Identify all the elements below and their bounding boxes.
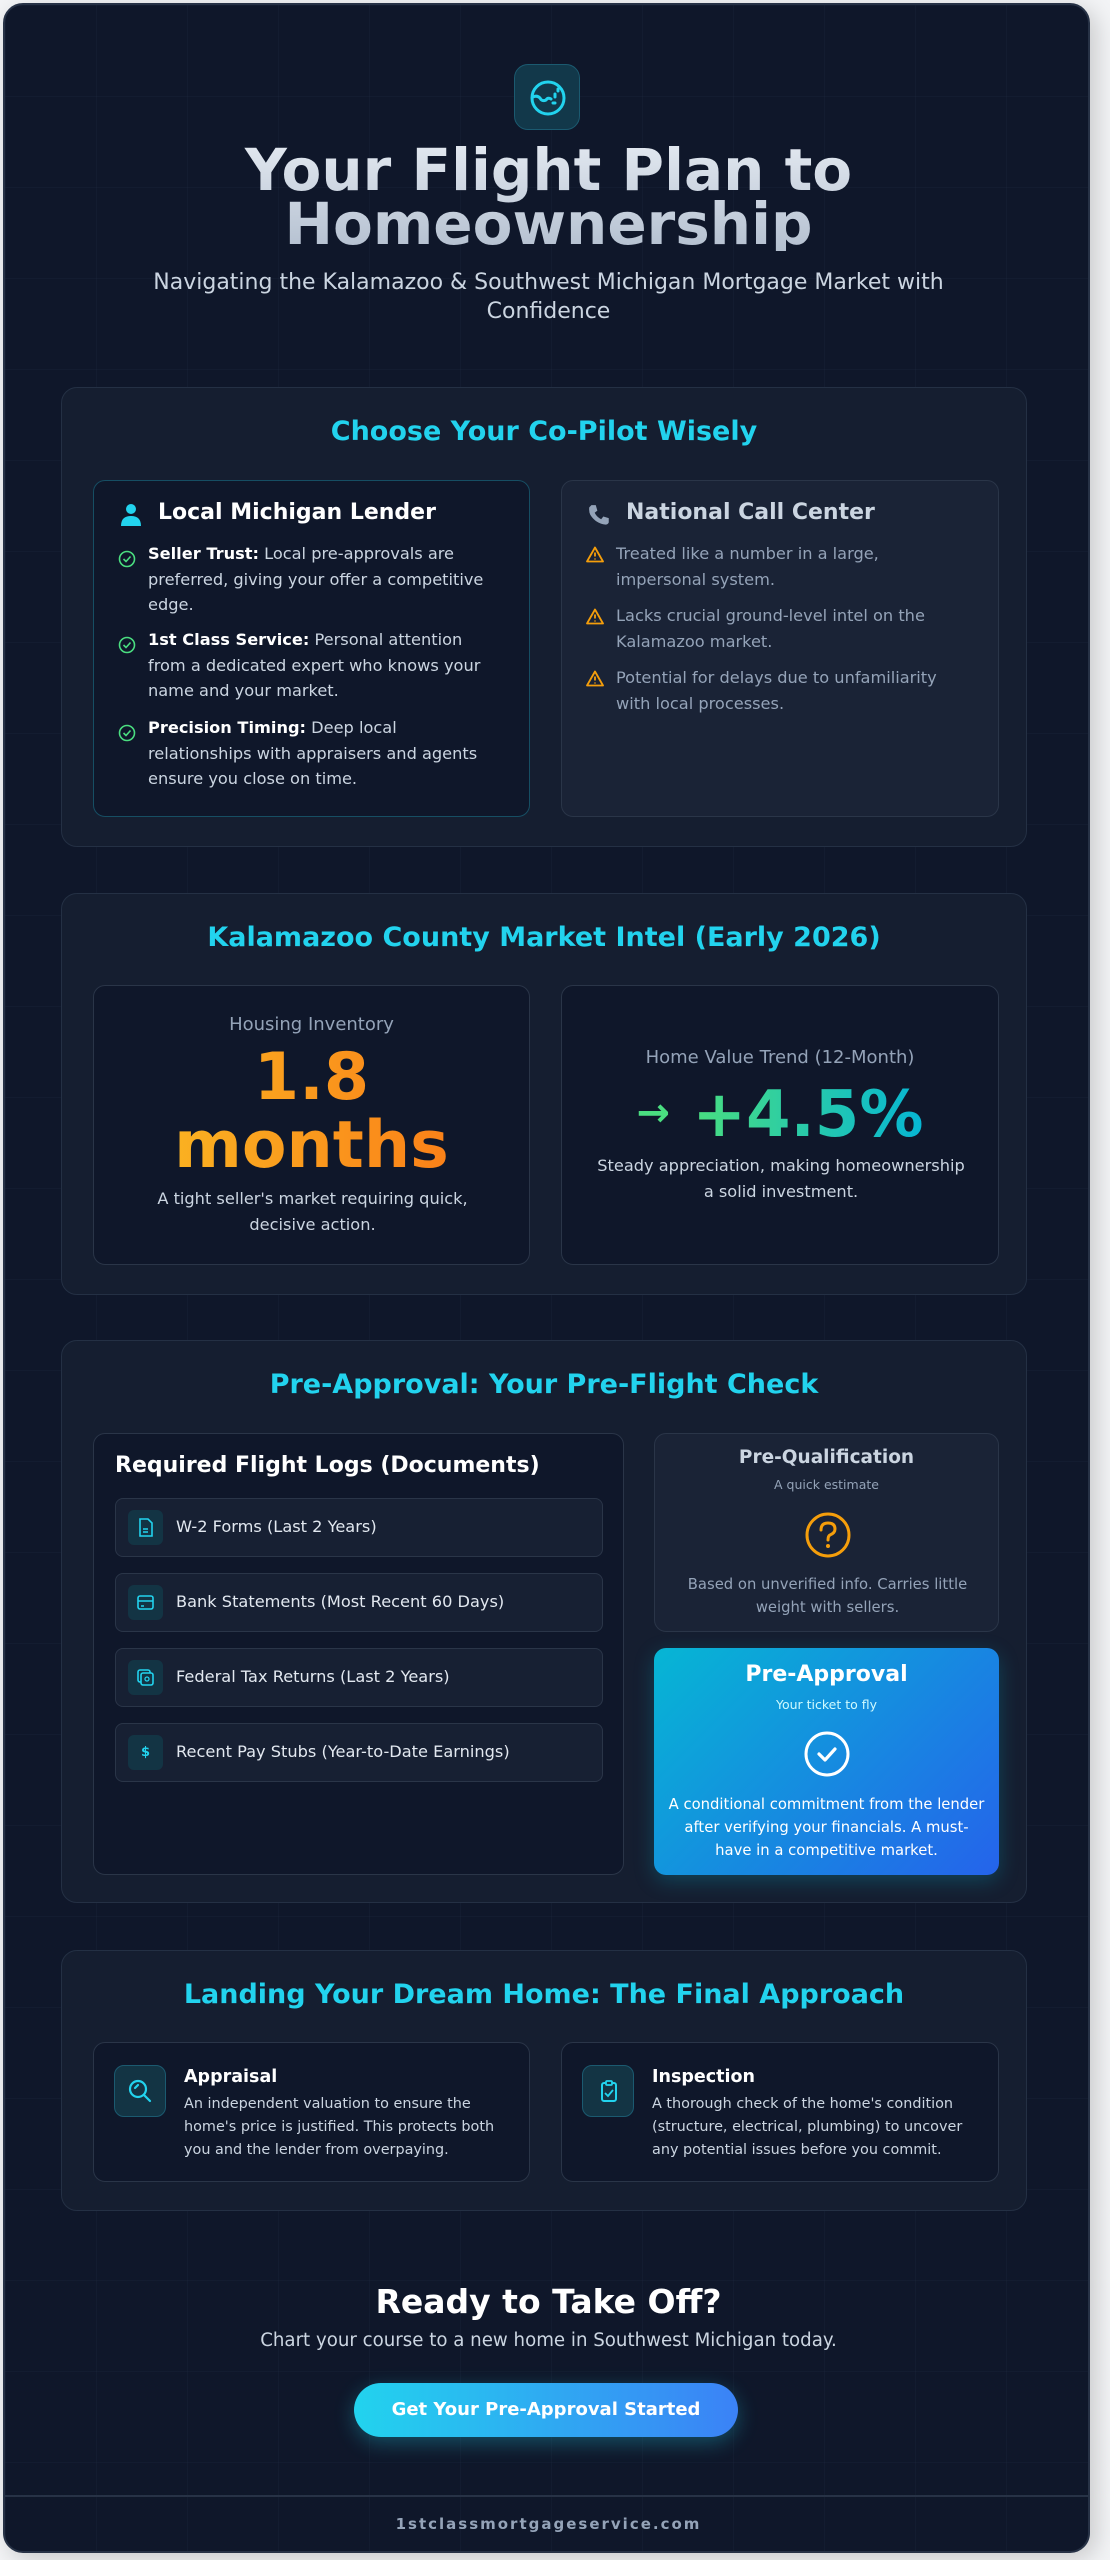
doc: bank statements [115, 1573, 603, 1632]
bullets: national: Lacks crucial ground-level intel on the Kalamazoo market. [616, 606, 925, 650]
stat: home value trend: Steady appreciation, making homeownership a solid investment. [597, 1156, 965, 1201]
cta heading: Ready to Take Off? [375, 2282, 722, 2321]
title [5, 143, 1092, 251]
card: pre-qualification: Pre-Qualification [739, 1447, 914, 1468]
doc: pay stubs: Recent Pay Stubs (Year-to-Date Earnings) [176, 1742, 510, 1761]
heading: final approach: Landing Your Dream Home: The Final Approach [184, 1979, 904, 2010]
heading: pre-approval: Pre-Approval: Your Pre-Flight Check [270, 1369, 818, 1400]
card: pre-approval: A conditional commitment from the lender after verifying your financials. A must-have in a competitive market. [669, 1796, 984, 1859]
card: inspection: A thorough check of the home's condition (structure, electrical, plumbing) to uncover any potential issues before you commit. [652, 2096, 962, 2158]
subtitle: Navigating the Kalamazoo & Southwest Michigan Mortgage Market with Confidence [153, 270, 944, 324]
bullets: local: 1st Class Service: Personal attention from a dedicated expert who knows your name and your market. [148, 630, 480, 700]
bullets: local: Precision Timing: Deep local relationships with appraisers and agents ensure you close on time. [148, 718, 477, 788]
card: appraisal [93, 2042, 530, 2182]
doc: W-2 [115, 1498, 603, 1557]
stat: home value trend: → +4.5% [637, 1078, 923, 1152]
doc: tax returns [115, 1648, 603, 1707]
bullets: national [586, 544, 937, 712]
bullets: local [118, 544, 483, 788]
card: national call center [561, 480, 999, 817]
card: pre-qualification [654, 1433, 999, 1632]
footer url: 1stclassmortgageservice.com [396, 2515, 701, 2533]
card: documents [93, 1433, 624, 1875]
bullets: local: Seller Trust: Local pre-approvals are preferred, giving your offer a competitive edge. [148, 544, 483, 614]
card: inspection: Inspection [652, 2067, 755, 2087]
card: pre-qualification: A quick estimate [774, 1477, 879, 1492]
card: appraisal: Appraisal [184, 2067, 277, 2087]
card: pre-approval: Pre-Approval [745, 1662, 908, 1687]
icon: person [121, 504, 141, 526]
stat: housing inventory: Housing Inventory [229, 1014, 394, 1035]
icon: phone [589, 505, 609, 525]
bullets: national: Treated like a number in a large, impersonal system. [616, 544, 879, 588]
panel: market intel [61, 893, 1027, 1295]
stat: housing inventory: months [174, 1108, 449, 1183]
cta button [354, 2383, 738, 2437]
heading: choose co-pilot: Choose Your Co-Pilot Wisely [331, 416, 757, 447]
heading: national: National Call Center [626, 500, 875, 525]
card: inspection [561, 2042, 999, 2182]
stat: home value trend: Home Value Trend (12-Month) [646, 1047, 914, 1068]
card: appraisal: An independent valuation to ensure the home's price is justified. This protects both you and the lender from overpaying. [184, 2096, 494, 2158]
doc: bank statements: Bank Statements (Most Recent 60 Days) [176, 1592, 504, 1611]
panel: final approach [61, 1950, 1027, 2211]
doc: pay stubs: $ [141, 1745, 150, 1760]
stat: housing inventory: A tight seller's market requiring quick, decisive action. [157, 1189, 468, 1234]
doc: tax returns: Federal Tax Returns (Last 2 Years) [176, 1667, 450, 1686]
title: Homeownership [284, 190, 813, 258]
card: pre-approval: Your ticket to fly [776, 1697, 877, 1712]
icon: check circle [804, 1732, 850, 1776]
cta subtitle: Chart your course to a new home in Southwest Michigan today. [260, 2330, 837, 2351]
icon: globe logo [514, 64, 580, 130]
icon: question [806, 1512, 850, 1558]
doc: pay stubs [115, 1723, 603, 1782]
heading: local lender: Local Michigan Lender [158, 500, 436, 525]
stat: housing inventory [93, 985, 530, 1265]
doc: W-2: W-2 Forms (Last 2 Years) [176, 1517, 377, 1536]
card: documents: Required Flight Logs (Documents) [115, 1453, 540, 1478]
card: local lender [93, 480, 530, 817]
card: pre-qualification: Based on unverified info. Carries little weight with sellers. [688, 1576, 967, 1616]
stat: home value trend [561, 985, 999, 1265]
panel: pre-approval [61, 1340, 1027, 1903]
bullets: national: Potential for delays due to unfamiliarity with local processes. [616, 668, 937, 712]
cta button: Get Your Pre-Approval Started [392, 2399, 700, 2420]
title: Your Flight Plan to [245, 136, 852, 204]
card: pre-approval [654, 1648, 999, 1875]
stat: housing inventory: 1.8 [254, 1040, 369, 1115]
heading: market intel: Kalamazoo County Market Intel (Early 2026) [207, 922, 881, 953]
panel: co-pilot [61, 387, 1027, 847]
